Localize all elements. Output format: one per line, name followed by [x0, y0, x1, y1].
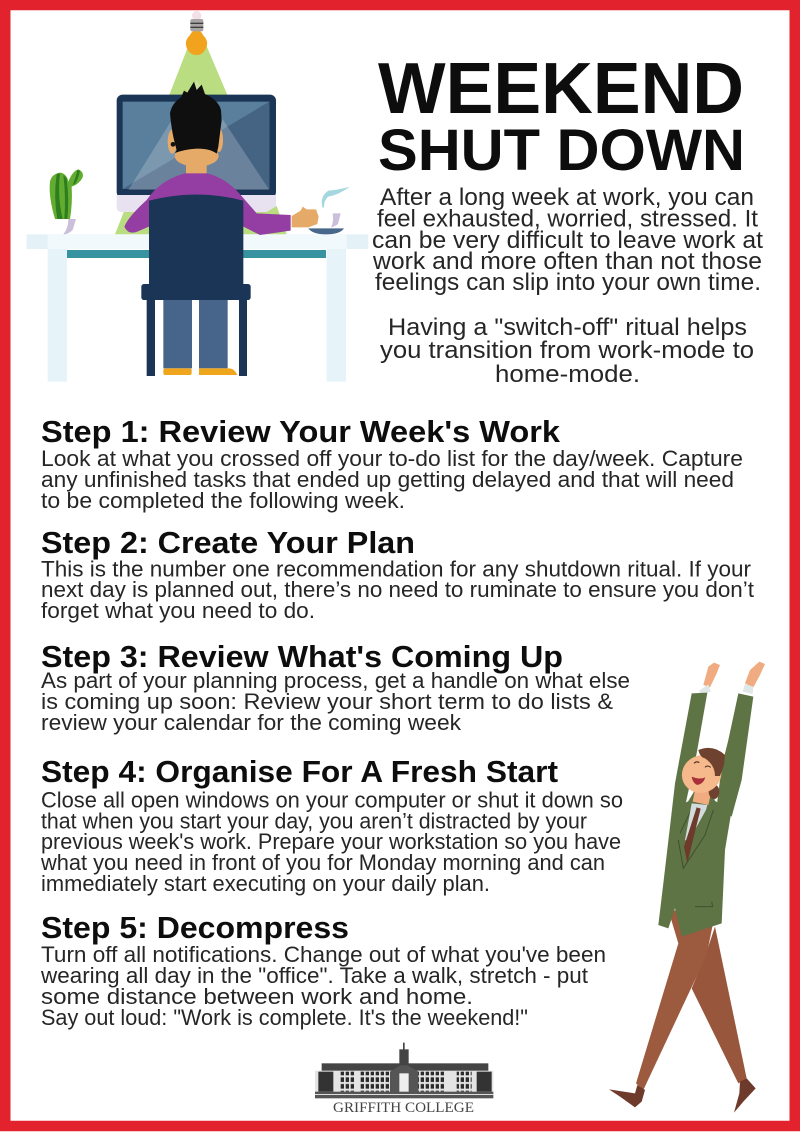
hair: [170, 82, 222, 154]
icon: coffee cup: [308, 187, 350, 234]
collar, shirt and tie: [684, 803, 707, 863]
intro text: After a long week at work, you can: [380, 184, 754, 211]
jacket and sleeves: [658, 693, 753, 937]
step 1: to be completed the following week.: [41, 488, 405, 513]
icon: light bulb: [186, 11, 207, 55]
title: WEEKEND: [378, 49, 744, 129]
intro text: home-mode.: [495, 361, 640, 388]
step 4: [40, 754, 623, 896]
step 1: Look at what you crossed off your to-do list for the day/week. Capture: [41, 446, 743, 471]
step 1: any unfinished tasks that ended up getting delayed and that will need: [41, 467, 734, 492]
step 3: As part of your planning process, get a handle on what else: [41, 668, 630, 693]
intro text: feelings can slip into your own time.: [375, 269, 761, 296]
neck and head: [186, 160, 207, 177]
icon: cactus: [50, 169, 83, 234]
desk: [27, 234, 368, 382]
step 5: Say out loud: "Work is complete. It's the weekend!": [41, 1005, 528, 1030]
monitor: [115, 80, 287, 234]
neck: [693, 790, 712, 805]
intro text: you transition from work-mode to: [380, 337, 754, 364]
step 4: previous week's work. Prepare your workstation so you have: [41, 829, 621, 854]
step 5: [40, 910, 606, 1030]
step 3: review your calendar for the coming week: [41, 710, 462, 735]
chair: [149, 194, 243, 285]
logo: Griffith College: GRIFFITH COLLEGE: [333, 1100, 474, 1116]
step 5: wearing all day in the "office". Take a walk, stretch - put: [40, 963, 588, 988]
intro text: [372, 184, 763, 388]
step 1: Step 1: Review Your Week's Work: [41, 414, 561, 449]
step 2: [41, 525, 754, 623]
person: [124, 82, 319, 376]
intro text: work and more often than not those: [372, 248, 762, 275]
step 5: Turn off all notifications. Change out of what you've been: [41, 942, 606, 967]
hands: [703, 663, 720, 687]
step 3: Step 3: Review What's Coming Up: [41, 639, 563, 674]
intro text: can be very difficult to leave work at: [372, 227, 763, 254]
step 4: Step 4: Organise For A Fresh Start: [41, 754, 558, 789]
step 2: next day is planned out, there’s no need to ruminate to ensure you don’t: [41, 577, 754, 602]
step 2: forget what you need to do.: [41, 598, 315, 623]
step 4: immediately start executing on your daily plan.: [41, 871, 490, 896]
step 3: [41, 639, 630, 735]
step 5: some distance between work and home.: [41, 984, 473, 1009]
light beam: [115, 40, 287, 234]
step 5: Step 5: Decompress: [41, 910, 349, 945]
illustration: person at desk: [27, 11, 368, 382]
illustration: cheering man: [609, 662, 765, 1113]
front leg: [636, 910, 715, 1090]
step 4: that when you start your day, you aren’t distracted by your: [41, 808, 587, 834]
intro text: Having a "switch-off" ritual helps: [388, 314, 747, 341]
cuffs: [699, 684, 711, 695]
step 4: Close all open windows on your computer or shut it down so: [41, 788, 623, 812]
step 2: This is the number one recommendation for any shutdown ritual. If your: [41, 556, 751, 582]
logo: Griffith College: [315, 1043, 493, 1116]
building: [315, 1043, 493, 1098]
step 2: Step 2: Create Your Plan: [41, 525, 415, 560]
step 1: [41, 414, 743, 513]
shoes: [609, 1085, 645, 1107]
shirt and arms: [124, 173, 291, 235]
step 3: is coming up soon: Review your short term to do lists &: [41, 689, 613, 714]
step 4: what you need in front of you for Monday morning and can: [40, 850, 605, 875]
trousers and shoes: [163, 298, 192, 368]
hand: [292, 207, 319, 227]
title: [378, 49, 745, 183]
intro text: feel exhausted, worried, stressed. It: [377, 206, 758, 232]
head: [676, 748, 728, 799]
title: SHUT DOWN: [378, 118, 745, 183]
back leg: [692, 927, 747, 1083]
